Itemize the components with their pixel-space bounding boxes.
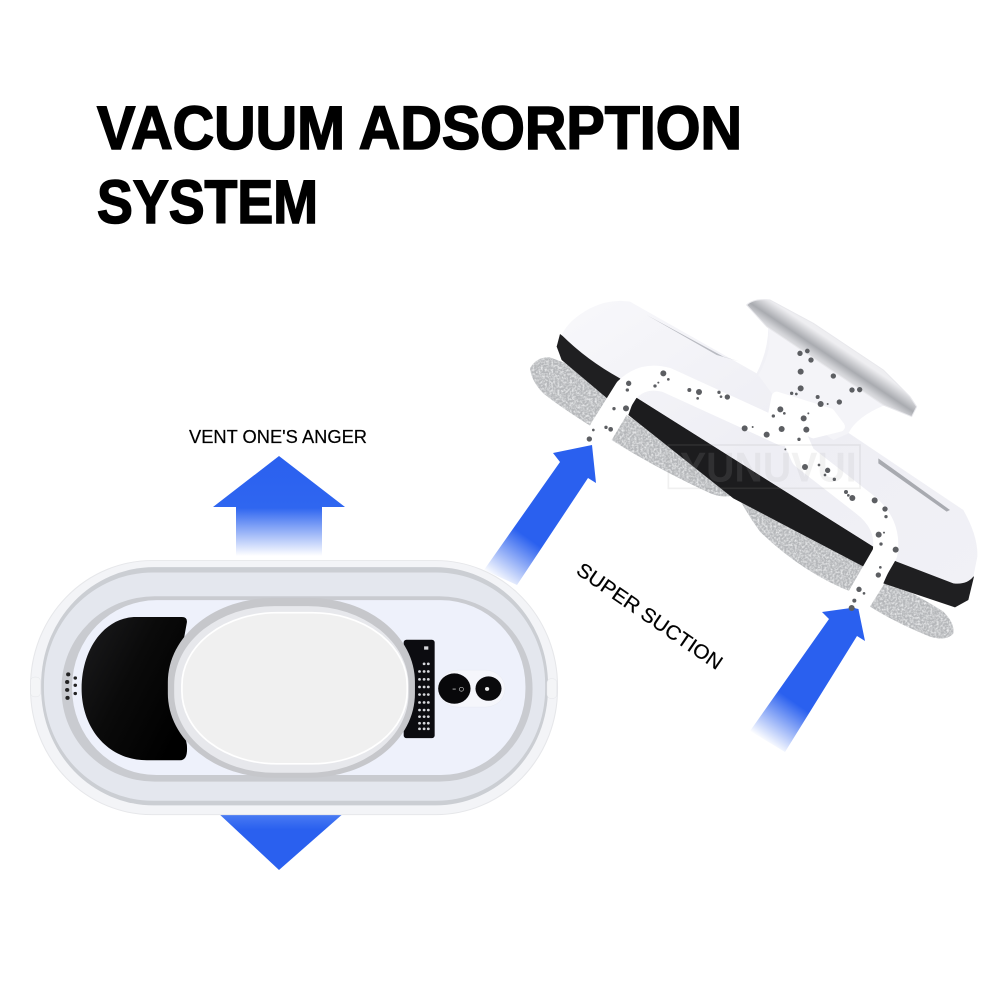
side clips (31, 677, 40, 697)
arrow: down exhaust (217, 812, 345, 870)
power switches (438, 670, 505, 707)
mop pad left (530, 357, 623, 427)
title (97, 94, 742, 236)
dotted grid panel (404, 640, 435, 738)
label: super suction: SUPER SUCTION (572, 559, 726, 675)
mop pad centre (612, 415, 867, 593)
robot outer shell (31, 561, 558, 815)
robot: side view with airflow (530, 300, 977, 639)
body shell (562, 301, 977, 584)
suction disc (747, 300, 917, 417)
arrow: suction left (484, 445, 596, 585)
black window (82, 617, 187, 760)
airflow channel (602, 378, 886, 597)
robot: top view (31, 561, 558, 815)
handle ring (168, 598, 415, 778)
mop pad right (870, 580, 954, 639)
handle face (182, 613, 407, 764)
speaker holes (65, 672, 77, 700)
robot inner panel (62, 596, 533, 782)
label: vent one's anger: VENT ONE'S ANGER (189, 427, 367, 447)
watermark: YUNUVUI (680, 444, 857, 491)
black base (557, 334, 622, 399)
arrow: up exhaust (213, 456, 345, 556)
suction disc stem (758, 327, 885, 440)
dust particles (587, 349, 899, 611)
title: VACUUM ADSORPTION (97, 94, 742, 162)
title: SYSTEM (97, 168, 318, 236)
arrow: suction right (750, 607, 865, 752)
